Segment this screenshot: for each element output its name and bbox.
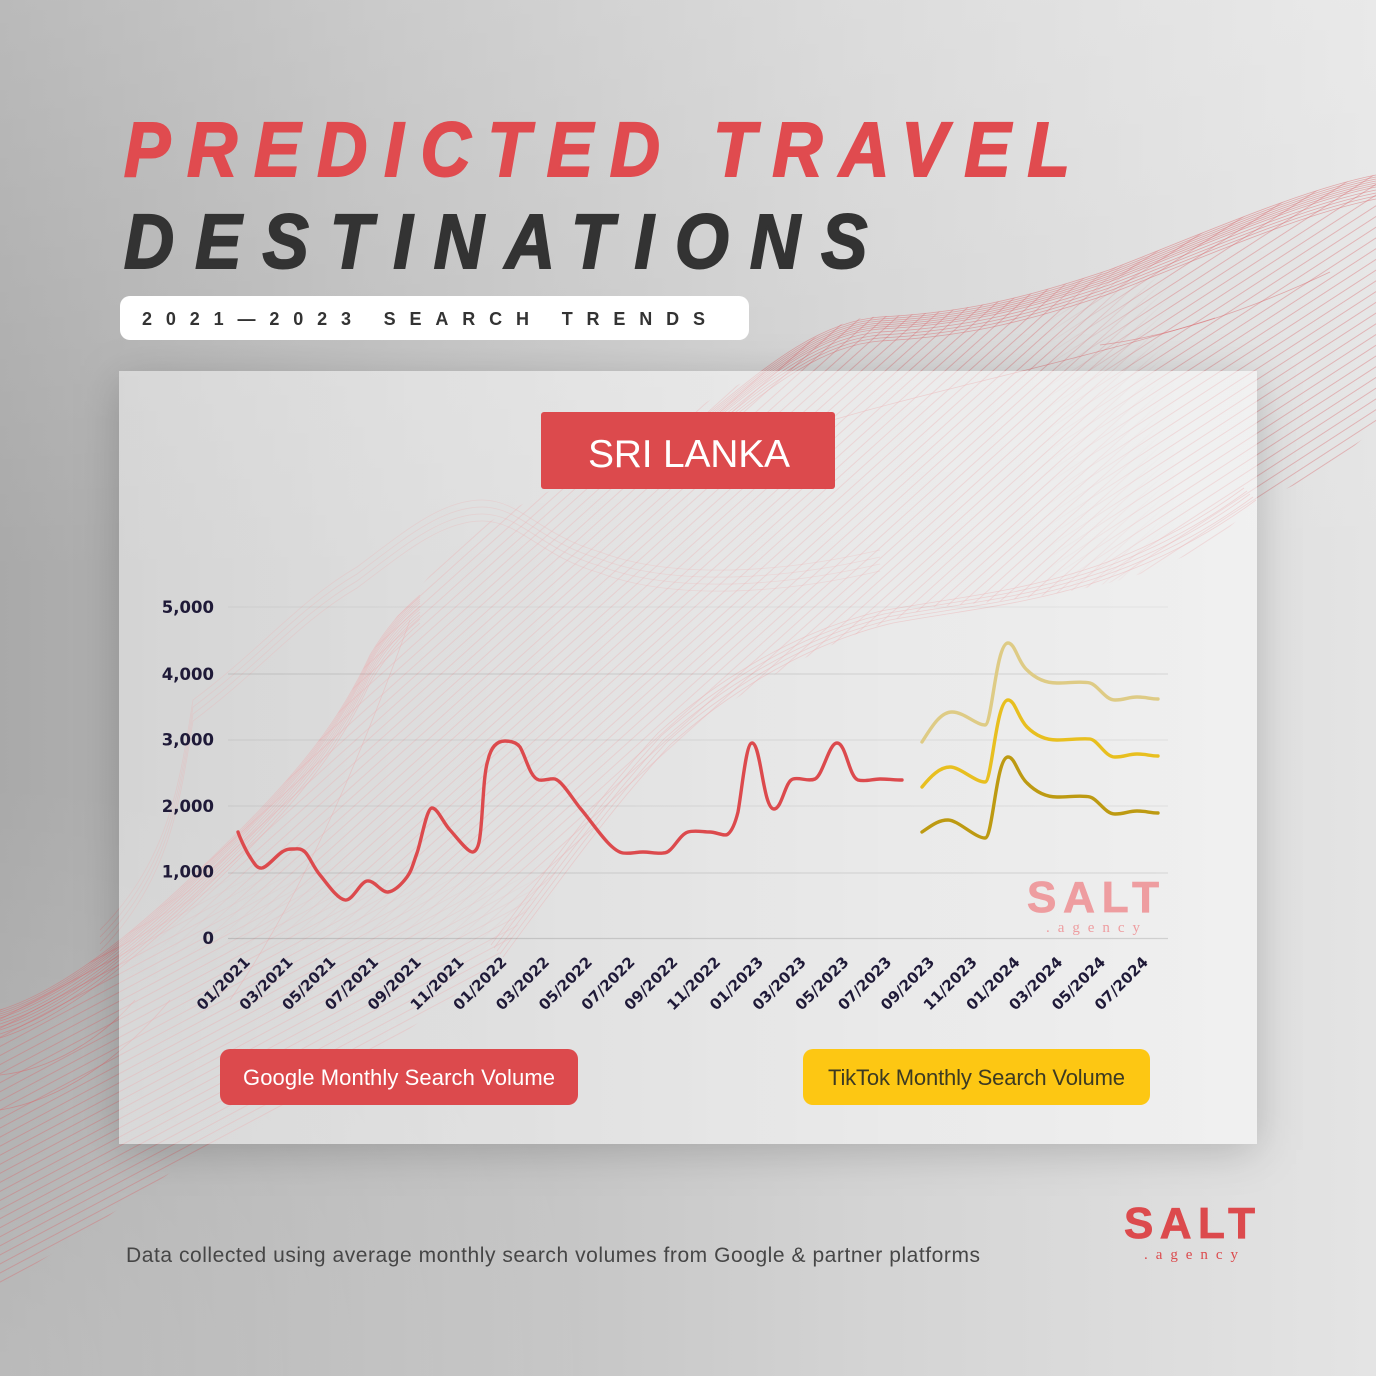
chart grid lines (228, 607, 1168, 938)
footer note: Data collected using average monthly search volumes from Google & partner platforms (126, 1244, 980, 1267)
legend: google: Google Monthly Search Volume (243, 1065, 555, 1090)
watermark logo: .agency (1046, 920, 1140, 936)
y axis labels: 3,000 (162, 730, 214, 750)
title line 2: DESTINATIONS (124, 199, 868, 285)
title (124, 107, 1070, 285)
x axis labels: 01/2022 (450, 953, 510, 1014)
watermark logo: SALT (1027, 873, 1159, 922)
x axis labels: 01/2024 (963, 953, 1024, 1014)
x axis labels: 03/2021 (236, 953, 297, 1014)
x axis labels: 07/2022 (578, 953, 639, 1014)
footer logo: .agency (1144, 1247, 1238, 1263)
panel background (119, 371, 1257, 1144)
x axis labels: 07/2024 (1091, 953, 1152, 1014)
google search volume line (238, 741, 902, 900)
x axis labels: 05/2021 (278, 953, 339, 1014)
subtitle pill: 2021—2023 SEARCH TRENDS (142, 309, 705, 329)
tiktok forecast line: lower (922, 757, 1158, 838)
y axis labels: 1,000 (162, 862, 214, 882)
subtitle pill (120, 296, 749, 340)
x axis labels: 09/2022 (621, 953, 681, 1014)
x axis labels: 03/2023 (749, 953, 810, 1014)
x axis labels: 05/2024 (1048, 953, 1109, 1014)
wave ridge bundles (0, 175, 1376, 1110)
legend: google (220, 1049, 578, 1105)
chart panel (119, 371, 1257, 1144)
x axis labels: 09/2023 (877, 953, 938, 1014)
destination badge (541, 412, 835, 489)
y axis labels: 4,000 (162, 665, 214, 684)
legend: tiktok (803, 1049, 1150, 1105)
panel shadow (119, 380, 1257, 1150)
x axis labels: 05/2022 (535, 953, 596, 1014)
x axis labels: 03/2024 (1005, 953, 1066, 1014)
x axis labels: 01/2023 (706, 953, 767, 1014)
y axis labels: 5,000 (162, 598, 214, 617)
title line 1: PREDICTED TRAVEL (124, 107, 1070, 193)
destination badge: SRI LANKA (588, 433, 790, 476)
x axis labels: 01/2021 (193, 953, 254, 1014)
x axis labels: 07/2023 (834, 953, 895, 1014)
x axis labels: 11/2022 (663, 953, 724, 1014)
x axis labels: 05/2023 (792, 953, 852, 1014)
y axis labels: 0 (203, 929, 214, 948)
x axis labels (193, 953, 1152, 1014)
x axis labels: 03/2022 (492, 953, 553, 1014)
x axis labels: 07/2021 (321, 953, 382, 1014)
y axis labels: 2,000 (162, 797, 214, 816)
x axis labels: 11/2021 (407, 953, 468, 1014)
tiktok forecast line: upper (922, 643, 1158, 742)
footer logo: SALT (1124, 1199, 1255, 1248)
x axis labels: 09/2021 (364, 953, 425, 1014)
x axis labels: 11/2023 (920, 953, 981, 1014)
tiktok forecast line: middle (922, 700, 1158, 787)
y axis labels (162, 598, 214, 948)
legend: tiktok: TikTok Monthly Search Volume (828, 1065, 1125, 1090)
